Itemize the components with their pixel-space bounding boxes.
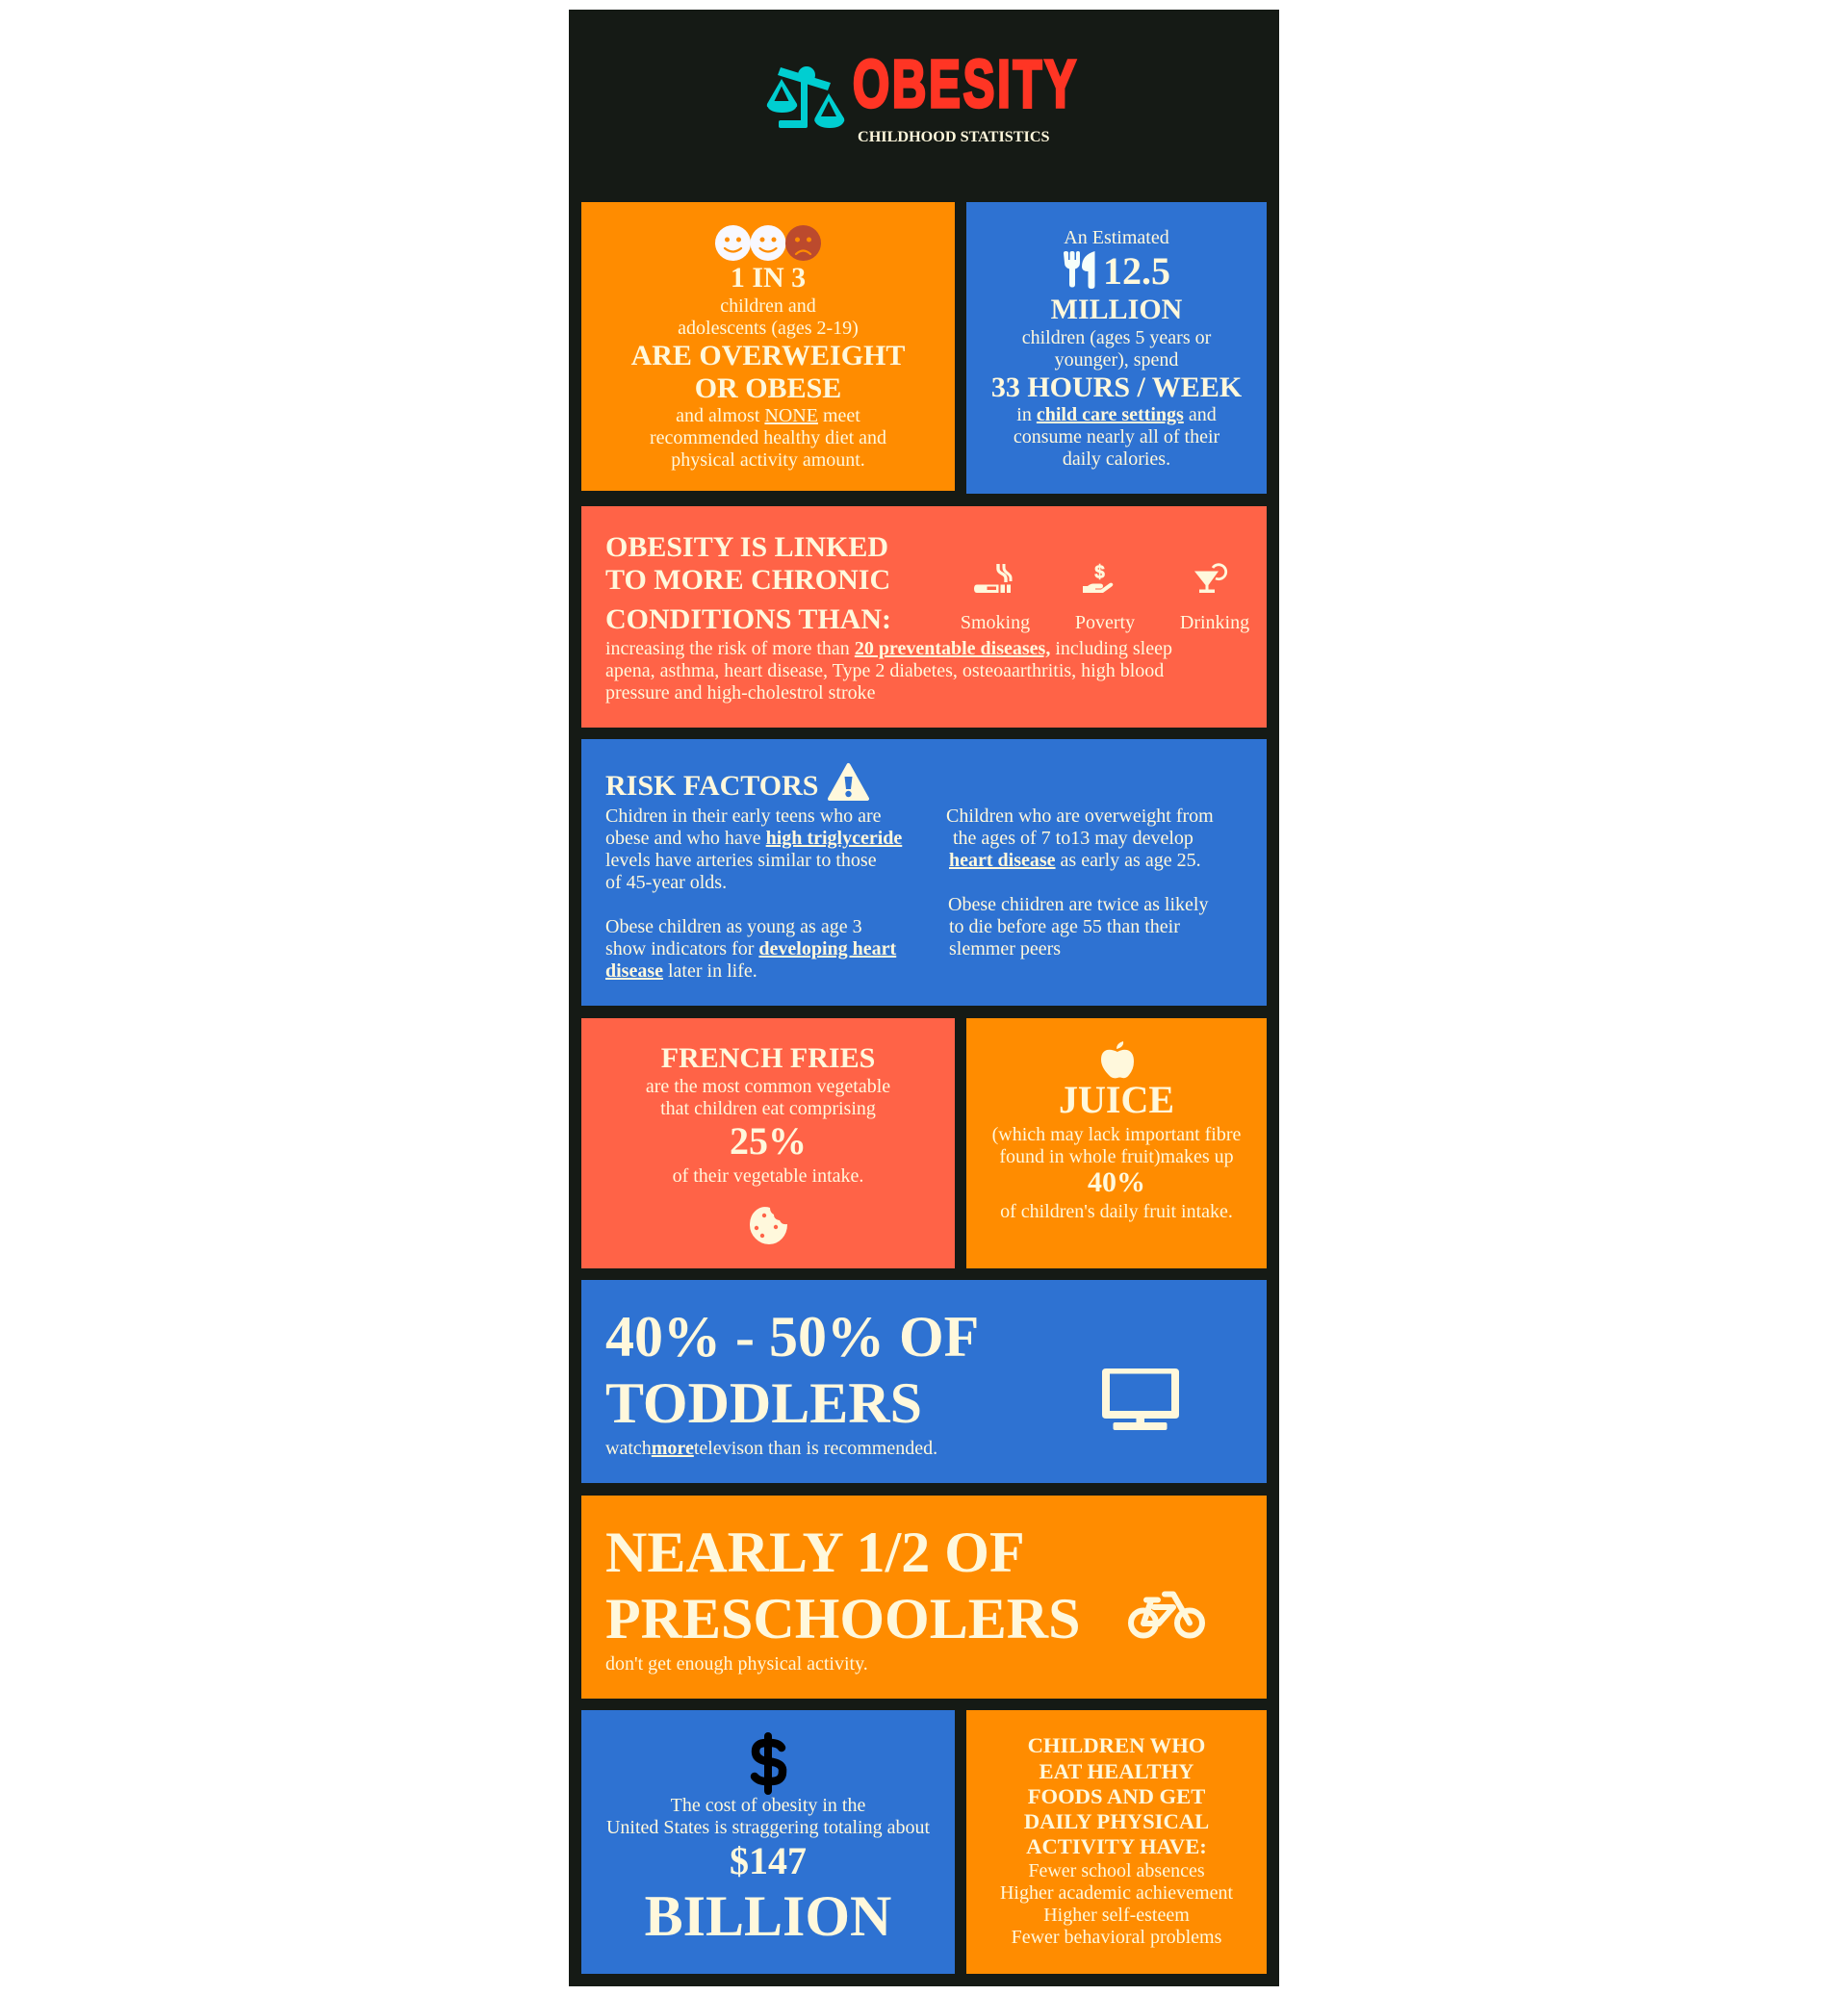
text: which may lack: (which may lack important fibre (992, 1124, 1241, 1145)
icon: drinking (1194, 563, 1228, 593)
icon: monitor (1102, 1368, 1179, 1430)
text: that children: that children eat comprising (660, 1098, 876, 1119)
text: right line 6: slemmer peers (949, 938, 1061, 959)
text: left line 6: show indicators for developing heart (605, 938, 896, 959)
text: left column paragraph 1: Chidren in their early teens who are (605, 806, 882, 827)
heading: 33 hours: 33 HOURS / WEEK (991, 371, 1242, 403)
text: right line 3: heart disease as early as age 25. (949, 850, 1201, 871)
panel: risk factors (581, 739, 1267, 1006)
heading: children who: CHILDREN WHO (1028, 1733, 1205, 1757)
text: consume: consume nearly all of their (1014, 426, 1219, 448)
heading: million: MILLION (1051, 294, 1182, 325)
heading: conditions than: CONDITIONS THAN: (605, 603, 891, 635)
text: increasing risk: increasing the risk of more than 20 preventable diseases, including sleep (605, 638, 1172, 659)
text: left line 4: of 45-year olds. (605, 872, 727, 893)
text: watch more television: watchmoretelevison than is recommended. (605, 1438, 937, 1459)
text: fewer behavioral: Fewer behavioral problems (1012, 1927, 1221, 1948)
label: drinking: Drinking (1180, 612, 1249, 633)
text: united states: United States is straggering totaling about (606, 1817, 930, 1838)
text: an estimated: An Estimated (1064, 227, 1169, 248)
panel: healthy children (966, 1710, 1267, 1974)
stat: 40%: 40% (1088, 1166, 1145, 1198)
icon: dollar sign (751, 1732, 787, 1795)
icon: fork and knife (1064, 251, 1095, 289)
text: right column paragraph 2: Obese chiidren are twice as likely (948, 894, 1208, 915)
text: left column paragraph 2: Obese children as young as age 3 (605, 916, 862, 937)
text: cost of obesity: The cost of obesity in the (671, 1795, 865, 1816)
text: left line 2: obese and who have high triglyceride (605, 828, 902, 849)
icon: poverty hand (1083, 562, 1113, 593)
heading: or obese: OR OBESE (695, 372, 841, 404)
heading: are overweight: ARE OVERWEIGHT (631, 340, 905, 371)
text: higher achievement: Higher academic achievement (1000, 1882, 1233, 1904)
text: physical activity: physical activity amount. (671, 449, 865, 471)
heading: to more chronic: TO MORE CHRONIC (605, 564, 890, 596)
heading: french fries: FRENCH FRIES (661, 1042, 875, 1074)
text: right line 5: to die before age 55 than their (949, 916, 1180, 937)
text: child care: in child care settings and (1016, 404, 1217, 425)
heading: daily physical: DAILY PHYSICAL (1024, 1809, 1209, 1833)
stat: 12.5: 12.5 (1103, 249, 1170, 293)
text: right line 2: the ages of 7 to13 may develop (953, 828, 1194, 849)
stat: billion: BILLION (645, 1884, 891, 1948)
stat: 1 in 3: 1 IN 3 (731, 262, 806, 294)
label: smoking: Smoking (961, 612, 1030, 633)
panel: cost (581, 1710, 955, 1974)
panel: preschoolers (581, 1496, 1267, 1699)
stat: 25%: 25% (730, 1119, 807, 1163)
text: found in whole fruit: found in whole fruit)makes up (999, 1146, 1234, 1167)
panel: french fries (581, 1018, 955, 1268)
text: physical activity: don't get enough physical activity. (605, 1653, 868, 1675)
text: higher self-esteem: Higher self-esteem (1043, 1905, 1190, 1926)
icon: cookie (750, 1207, 787, 1244)
panel: toddlers (581, 1280, 1267, 1483)
text: of their: of their vegetable intake. (673, 1165, 863, 1187)
text: pressure: pressure and high-cholestrol stroke (605, 682, 875, 703)
text: younger: younger), spend (1055, 349, 1178, 371)
label: poverty: Poverty (1075, 612, 1135, 633)
text: left line 7: disease later in life. (605, 960, 757, 982)
text: and almost none: and almost NONE meet (676, 405, 860, 426)
heading: toddlers: TODDLERS (605, 1371, 922, 1435)
panel: juice (966, 1018, 1267, 1268)
icon: bicycle (1128, 1592, 1205, 1638)
text: children ages: children (ages 5 years or (1022, 327, 1211, 348)
icon: faces (715, 225, 821, 261)
text: most common: are the most common vegetable (646, 1076, 890, 1097)
heading: obesity is linked: OBESITY IS LINKED (605, 531, 888, 563)
panel: chronic conditions (581, 506, 1267, 728)
text: recommended: recommended healthy diet and (650, 427, 886, 448)
icon: smoking (974, 564, 1013, 593)
heading: activity have: ACTIVITY HAVE: (1026, 1834, 1207, 1858)
subtitle: CHILDHOOD STATISTICS (858, 128, 1050, 145)
heading: foods and get: FOODS AND GET (1028, 1784, 1205, 1808)
header (766, 46, 1079, 145)
icon: poverty hand: $ (1094, 562, 1105, 583)
icon: apple (1101, 1041, 1134, 1078)
background frame (569, 10, 1279, 1986)
heading: 40% - 50% of: 40% - 50% OF (605, 1305, 979, 1368)
heading: nearly 1/2 of: NEARLY 1/2 OF (605, 1521, 1025, 1584)
text: adolescents: adolescents (ages 2-19) (678, 318, 859, 339)
text: children and: children and (720, 295, 816, 317)
stat: $147: $147 (730, 1839, 807, 1882)
heading: juice: JUICE (1059, 1078, 1174, 1121)
text: fewer absences: Fewer school absences (1028, 1860, 1205, 1881)
panel: 12.5 million (966, 202, 1267, 494)
icon: balance scale (766, 66, 845, 128)
heading: risk factors: RISK FACTORS (605, 770, 818, 802)
text: of children's: of children's daily fruit intake. (1000, 1201, 1233, 1222)
text: apena: apena, asthma, heart disease, Type 2 diabetes, osteoaarthritis, high blood (605, 660, 1164, 681)
panel: 1 in 3 (581, 202, 955, 491)
title: OBESITY (853, 46, 1079, 121)
icon: warning (828, 762, 870, 801)
heading: preschoolers: PRESCHOOLERS (605, 1587, 1080, 1650)
heading: eat healthy: EAT HEALTHY (1040, 1759, 1194, 1783)
text: right column paragraph 1: Children who are overweight from (946, 806, 1214, 827)
text: daily calories: daily calories. (1063, 448, 1170, 470)
text: left line 3: levels have arteries similar to those (605, 850, 877, 871)
